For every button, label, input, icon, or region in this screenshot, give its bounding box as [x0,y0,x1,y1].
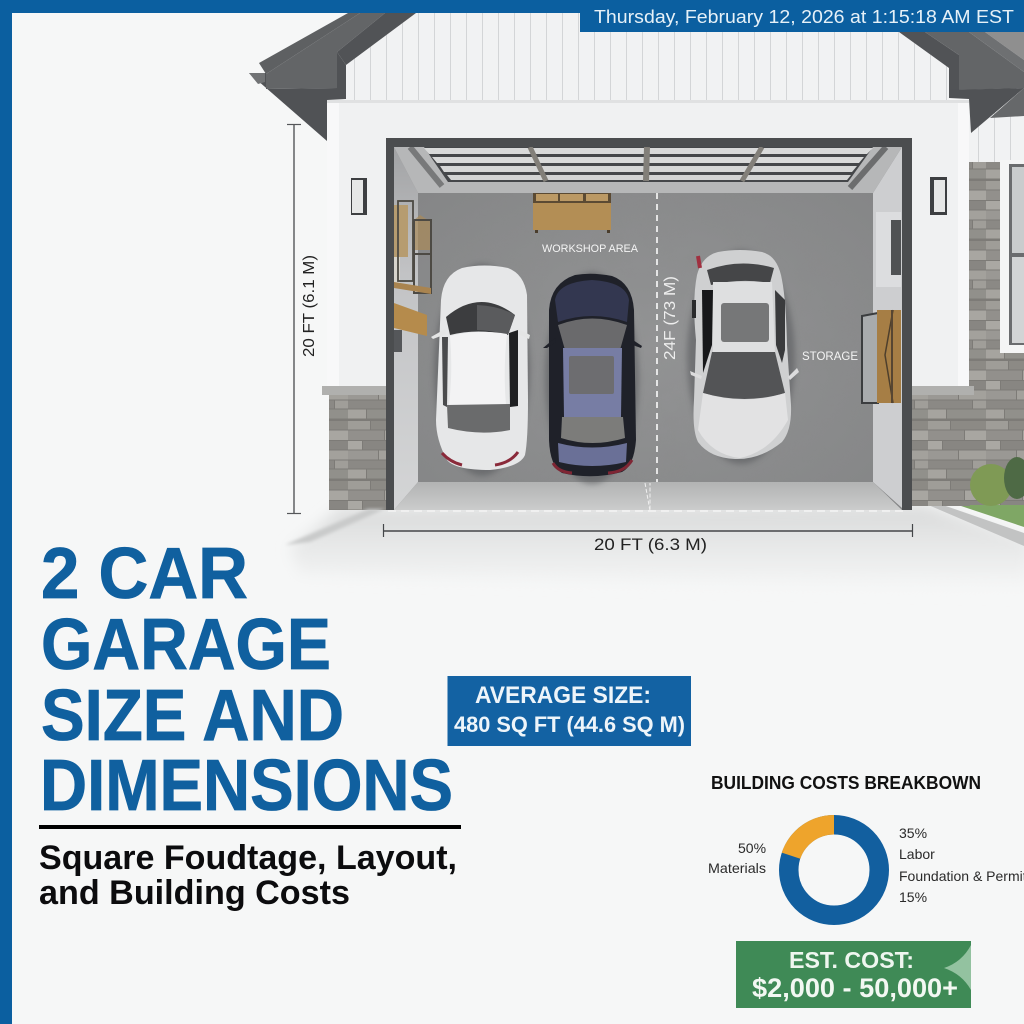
left driveway curb [285,509,385,545]
wall lamp right [930,177,947,215]
dashed floor line [388,510,908,512]
left side wall [394,147,418,510]
gable siding [346,13,949,101]
garage interior [386,138,912,511]
left wall rack [394,201,431,294]
white wall [327,100,969,388]
average size box: 480 SQ FT (44.6 SQ M) [454,712,685,737]
title: DIMENSIONS [40,746,453,826]
average size box [448,676,691,746]
silver car [690,250,799,459]
donut labels right: 15% [899,889,927,905]
dimension: width: 20 FT (6.3 M) [594,535,707,554]
title: SIZE AND [41,676,344,756]
average size box: AVERAGE SIZE: [475,682,651,709]
donut labels left [708,840,766,876]
left wall bracket [394,330,402,352]
house facade [249,13,1024,546]
title: 2 CAR [41,534,248,614]
donut labels left: 50% [738,840,766,856]
left roof [249,13,416,141]
wall lamp left [351,178,367,215]
workshop label: WORKSHOP AREA [542,243,639,255]
ceiling [394,147,902,193]
dimension: height: 20 FT (6.1 M) [301,255,318,357]
donut chart [782,815,879,915]
left stone base [322,386,386,510]
donut labels right: Labor [899,846,935,862]
storage cabinet [862,310,901,403]
subtitle [39,839,457,912]
dashed floor tick [645,483,650,511]
side window [1000,160,1024,353]
driveway [290,505,1024,590]
donut labels right [899,825,1024,905]
workbench shelf [533,193,611,233]
donut labels right: 35% [899,825,927,841]
door tracks [410,147,442,186]
estimated cost box: EST. COST: [789,947,914,973]
bushes and grass [926,457,1024,546]
car shadows [434,250,795,484]
window on right side wall [876,212,901,287]
white car [431,266,530,470]
side siding [969,112,1024,162]
front floor apron [394,482,902,510]
left wall wooden crate [394,303,427,336]
back wall floor [394,147,902,510]
title [40,534,453,826]
right side wall [873,147,902,508]
concrete texture [418,193,873,482]
date banner [580,0,1024,32]
right roof [899,32,1024,133]
subtitle: and Building Costs [39,874,350,912]
title: GARAGE [41,605,331,685]
chart title: BUILDING COSTS BREAKBOWN [711,773,981,793]
donut labels left: Materials [708,860,766,876]
gable siding top [400,13,899,32]
donut labels right: Foundation & Permit [899,868,1024,884]
door frame [386,138,912,510]
left blue bar [0,0,12,1024]
date banner: Thursday, February 12, 2026 at 1:15:18 AM EST [594,6,1014,27]
title rule [39,825,461,829]
center dashed line [656,193,658,482]
estimated cost box: $2,000 - 50,000+ [752,973,958,1003]
navy car [543,274,642,476]
depth label: 24F (73 M) [662,276,679,360]
right stone base [912,386,974,506]
top blue bar [0,0,1024,13]
storage label: STORAGE [802,351,858,363]
side stone wall [968,162,1024,507]
estimated cost box [736,941,971,1008]
subtitle: Square Foudtage, Layout, [39,839,457,877]
